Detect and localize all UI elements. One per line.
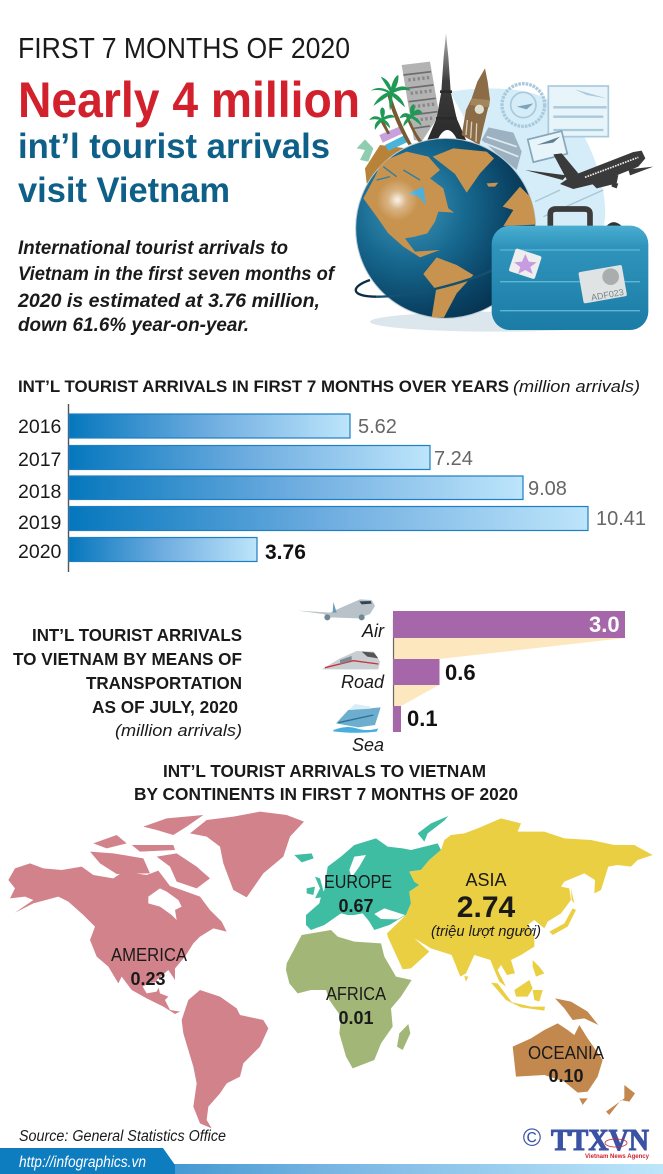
- bar chart: arrivals by year: 2017: [18, 449, 61, 471]
- bar chart: arrivals by year: 2016: [18, 416, 61, 438]
- ring back: [356, 280, 377, 297]
- bar chart title: (million arrivals): [513, 377, 640, 396]
- transport chart: 0.6: [445, 660, 476, 685]
- globe: [356, 138, 536, 318]
- transport title: AS OF JULY, 2020: [92, 697, 238, 717]
- subheadline: int’l tourist arrivals: [18, 127, 330, 166]
- colosseum: [482, 127, 522, 170]
- transport title: TO VIETNAM BY MEANS OF: [13, 649, 242, 669]
- illustration: globe and travel: [356, 33, 653, 332]
- continent: Asia: [387, 818, 653, 1011]
- map title: INT’L TOURIST ARRIVALS TO VIETNAM: [163, 761, 486, 781]
- palms: [387, 92, 412, 145]
- transport title: [13, 625, 242, 740]
- label: Asia: ASIA: [465, 870, 507, 890]
- label: Europe: 0.67: [338, 896, 374, 916]
- transport title: (million arrivals): [115, 721, 242, 740]
- bar chart: arrivals by year: 2019: [18, 512, 61, 534]
- bar chart: arrivals by year: 3.76: [265, 541, 306, 564]
- label: Europe: EUROPE: [324, 872, 392, 892]
- bar chart: arrivals by year: 10.41: [596, 508, 646, 530]
- bar chart: arrivals by year: 9.08: [528, 478, 567, 500]
- label: Oceania: OCEANIA: [528, 1043, 604, 1063]
- continent: Oceania: [513, 998, 635, 1115]
- label: Africa: [326, 984, 386, 1028]
- source: Source: General Statistics Office: [19, 1128, 226, 1145]
- transport chart: [341, 611, 625, 755]
- intro paragraph: [17, 238, 336, 336]
- icon: train: [322, 651, 380, 669]
- footer band: [0, 1148, 663, 1174]
- eiffel tower: [427, 33, 466, 140]
- map title: BY CONTINENTS IN FIRST 7 MONTHS OF 2020: [134, 784, 518, 804]
- bar chart: arrivals by year: 5.62: [358, 416, 397, 438]
- footer band: http://infographics.vn: [19, 1154, 146, 1171]
- logo: TTXVN: Vietnam News Agency: [585, 1153, 649, 1160]
- airplane: [525, 151, 653, 189]
- subheadline: visit Vietnam: [18, 171, 230, 210]
- label: Asia: [431, 870, 541, 940]
- world map: [8, 812, 653, 1128]
- continent: America: [8, 812, 304, 1128]
- label: Africa: AFRICA: [326, 984, 386, 1004]
- big ben: [462, 68, 490, 145]
- headline: Nearly 4 million: [18, 72, 360, 128]
- subheadline: [18, 127, 330, 210]
- label: America: 0.23: [130, 969, 166, 989]
- bar chart title: INT’L TOURIST ARRIVALS IN FIRST 7 MONTHS OVER YEARS: [18, 377, 509, 396]
- transport chart: Air: [361, 621, 385, 641]
- transport chart: 3.0: [589, 612, 620, 637]
- logo: TTXVN: [523, 1122, 649, 1160]
- intro paragraph: International tourist arrivals to: [18, 238, 288, 259]
- pisa tower: [402, 62, 439, 142]
- icon: airplane: [297, 599, 375, 620]
- transport chart: Sea: [352, 735, 384, 755]
- logo: TTXVN: ©: [523, 1124, 542, 1152]
- label: Oceania: 0.10: [548, 1066, 584, 1086]
- label: Africa: 0.01: [338, 1008, 374, 1028]
- stamps: [502, 84, 608, 162]
- bar chart: arrivals by year: [18, 404, 646, 572]
- transport chart: Road: [341, 672, 385, 692]
- transport title: INT’L TOURIST ARRIVALS: [32, 625, 242, 645]
- label: Asia: 2.74: [457, 891, 516, 924]
- bag and signs: [365, 145, 407, 183]
- bar chart: arrivals by year: 2018: [18, 481, 61, 503]
- hudson bay and gulf: [143, 888, 182, 993]
- transport chart: 0.1: [407, 706, 438, 731]
- bar chart: arrivals by year: 2020: [18, 541, 62, 563]
- map title: [134, 761, 518, 804]
- continent: Africa: [286, 930, 412, 1068]
- continent: Europe: [294, 816, 448, 930]
- label: America: AMERICA: [111, 945, 187, 965]
- intro paragraph: 2020 is estimated at 3.76 million,: [17, 291, 320, 312]
- bar chart: arrivals by year: 7.24: [434, 448, 473, 470]
- logo: TTXVN: TTXVN: [551, 1122, 649, 1157]
- intro paragraph: down 61.6% year-on-year.: [18, 315, 249, 336]
- intro paragraph: Vietnam in the first seven months of: [18, 264, 336, 285]
- icon: ship: [333, 704, 381, 733]
- label: Oceania: [528, 1043, 604, 1086]
- label: Europe: [324, 872, 392, 916]
- illustration: globe and travel: ADF023: [590, 287, 624, 303]
- label: Asia: (triệu lượt người): [431, 923, 541, 940]
- label: America: [111, 945, 187, 989]
- header kicker: FIRST 7 MONTHS OF 2020: [18, 33, 350, 65]
- map labels: [111, 870, 604, 1086]
- transport title: TRANSPORTATION: [86, 673, 242, 693]
- ring front: [377, 270, 493, 297]
- suitcase: [550, 209, 590, 226]
